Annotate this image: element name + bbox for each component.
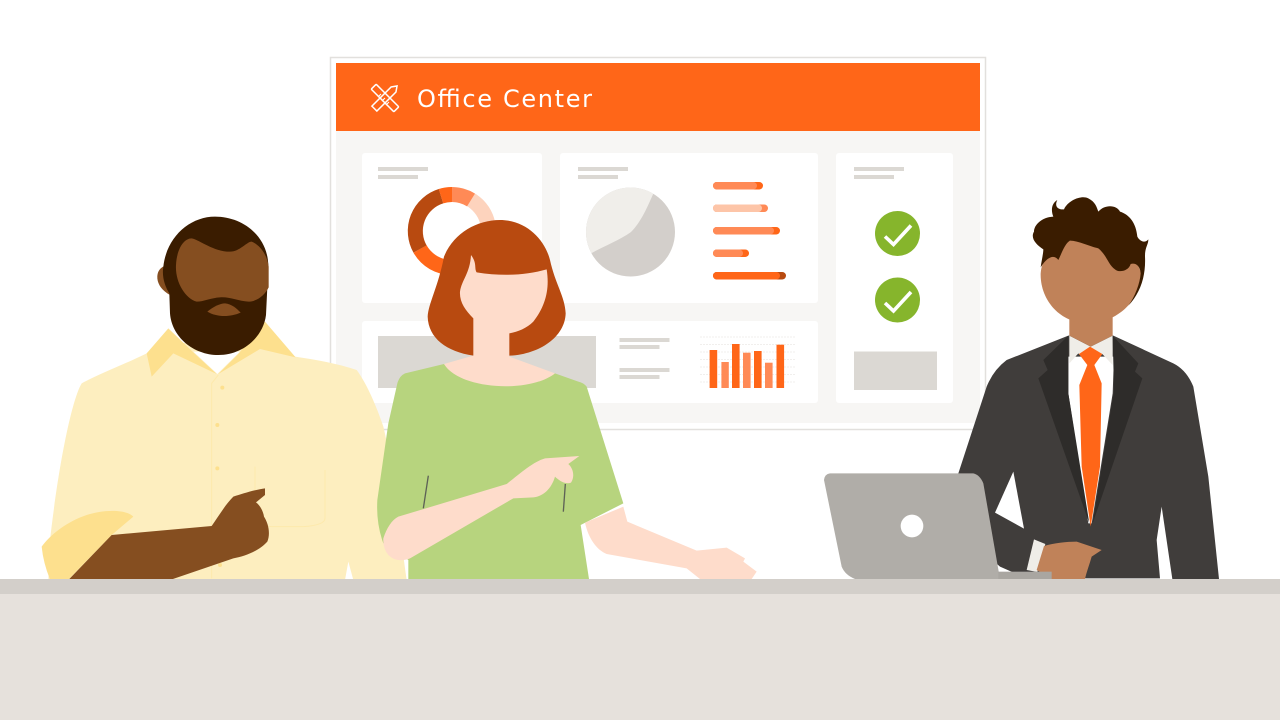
horizontal bars	[713, 182, 786, 280]
header bar	[336, 63, 980, 131]
shirt placket, buttons and pocket	[212, 375, 325, 578]
person: man in dark suit	[824, 197, 1219, 579]
orange tie	[1079, 347, 1102, 527]
forearm and pointing hand	[68, 488, 269, 580]
hand	[1037, 542, 1102, 579]
ear	[157, 265, 170, 295]
curly hair	[1033, 197, 1148, 306]
face	[1041, 240, 1142, 323]
icon: crossed ruler and pencil	[371, 84, 399, 112]
panel: dashboard board	[330, 58, 986, 430]
shirt collar	[1069, 336, 1113, 367]
neck	[1069, 313, 1113, 347]
face, neck and chest	[444, 255, 555, 386]
green top	[377, 364, 623, 579]
bar chart	[700, 337, 795, 388]
icon: check mark two	[875, 278, 920, 322]
face	[176, 238, 269, 302]
panel: lower summary card	[362, 321, 818, 403]
yellow shirt	[48, 333, 407, 580]
person: woman in green top	[377, 220, 757, 579]
panel: status checks card	[836, 153, 953, 403]
pie chart	[586, 188, 675, 276]
person: man in yellow shirt	[42, 217, 407, 580]
laptop	[824, 473, 1052, 579]
heading: Office Center: Office Center	[417, 85, 592, 113]
panel: pie chart and bars card	[560, 153, 818, 303]
donut chart	[415, 194, 488, 268]
hair	[428, 220, 566, 356]
collar	[147, 322, 296, 377]
mouth	[207, 303, 241, 316]
suit jacket	[950, 336, 1219, 579]
white shirt	[1068, 357, 1114, 523]
icon: check mark one	[875, 211, 920, 256]
back arm and hand	[585, 507, 757, 579]
shirt cuff	[1027, 539, 1045, 572]
sleeve creases	[423, 476, 565, 512]
hair and beard	[163, 217, 268, 355]
front arm and pointing hand	[383, 456, 579, 560]
jacket lapels	[1038, 336, 1142, 523]
rolled sleeve cuff	[42, 511, 133, 579]
desk surface	[0, 579, 1280, 720]
panel: donut chart card	[362, 153, 542, 303]
